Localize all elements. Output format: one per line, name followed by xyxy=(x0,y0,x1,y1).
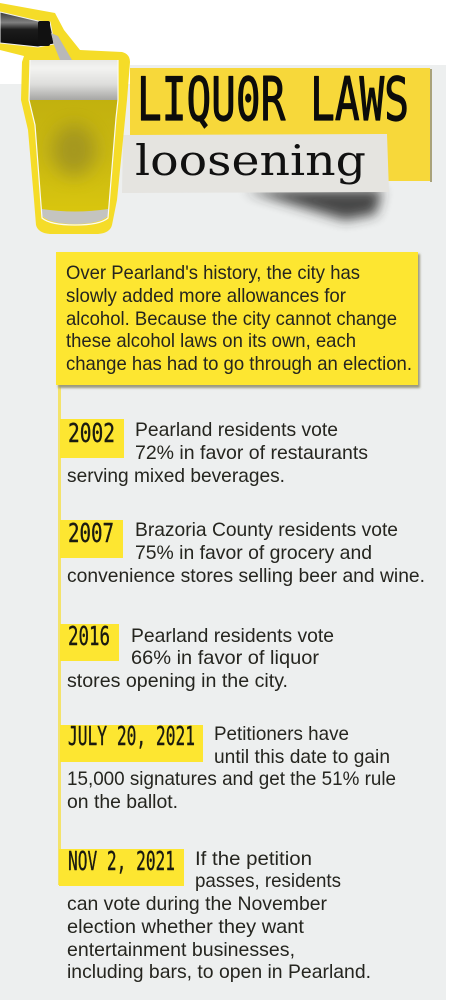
icon: beer glass and bottle xyxy=(0,3,130,234)
title banner xyxy=(130,65,432,182)
paper shadow xyxy=(245,190,382,220)
intro text: slowly added more allowances for xyxy=(66,285,346,307)
timeline entry: 2002: 2002 xyxy=(68,419,115,449)
timeline entry: Nov 2, 2021: entertainment businesses, xyxy=(67,939,295,961)
timeline entry: 2002 xyxy=(60,419,368,487)
timeline entry: Nov 2, 2021: If the petition xyxy=(195,848,312,870)
intro text: alcohol. Because the city cannot change xyxy=(66,308,397,330)
paper strip xyxy=(122,134,389,193)
intro text: Over Pearland's history, the city has xyxy=(66,262,360,284)
timeline entry: 2007: convenience stores selling beer and wine. xyxy=(67,565,425,587)
intro text xyxy=(66,262,412,375)
heading: loosening: loosening xyxy=(135,136,366,185)
timeline entry: July 20, 2021: 15,000 signatures and get the 51% rule xyxy=(67,768,396,790)
timeline entry: 2002: serving mixed beverages. xyxy=(67,465,285,487)
timeline entry: Nov 2, 2021: can vote during the November xyxy=(67,893,328,915)
timeline entry: Nov 2, 2021: election whether they want xyxy=(67,916,305,938)
intro text: change has had to go through an election. xyxy=(66,353,412,375)
intro text: these alcohol laws on its own, each xyxy=(66,330,356,352)
timeline entry: 2002: Pearland residents vote xyxy=(135,419,338,441)
timeline entry: 2016: Pearland residents vote xyxy=(131,625,334,647)
timeline entry: 2016 xyxy=(60,622,334,692)
timeline entry: July 20, 2021: JULY 20, 2021 xyxy=(68,722,195,752)
timeline entry: 2016: 66% in favor of liquor xyxy=(131,647,320,669)
timeline entry: July 20, 2021: Petitioners have xyxy=(214,723,349,745)
intro box xyxy=(56,252,420,388)
timeline line xyxy=(58,385,61,885)
timeline entry: 2002: 72% in favor of restaurants xyxy=(135,442,368,464)
timeline entry: 2007: 2007 xyxy=(68,519,114,549)
timeline entry: 2007: 75% in favor of grocery and xyxy=(135,542,372,564)
timeline entry: Nov 2, 2021 xyxy=(59,847,371,983)
timeline entry: July 20, 2021: until this date to gain xyxy=(214,746,390,768)
timeline entry: 2016: 2016 xyxy=(68,622,110,652)
timeline entry: 2016: stores opening in the city. xyxy=(67,670,288,692)
timeline entry: 2007: Brazoria County residents vote xyxy=(135,519,398,541)
timeline entry: July 20, 2021 xyxy=(60,722,396,813)
timeline entry: Nov 2, 2021: passes, residents xyxy=(195,870,341,892)
timeline entry: Nov 2, 2021: NOV 2, 2021 xyxy=(68,847,175,877)
timeline entry: Nov 2, 2021: including bars, to open in Pearland. xyxy=(67,961,371,983)
timeline entry: 2007 xyxy=(60,519,425,587)
timeline entry: July 20, 2021: on the ballot. xyxy=(67,791,178,813)
